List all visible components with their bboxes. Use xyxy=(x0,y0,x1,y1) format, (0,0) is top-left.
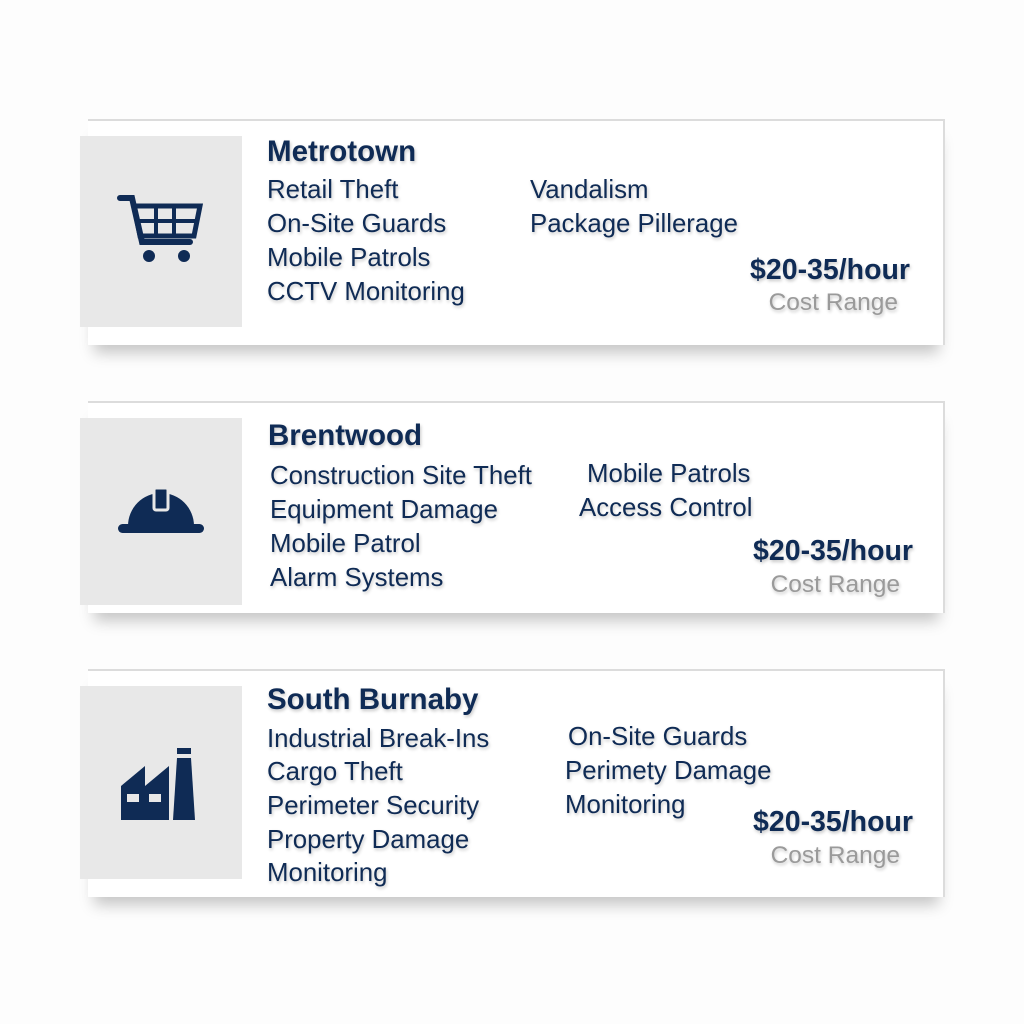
panel: South Burnaby: Property Damage xyxy=(267,826,469,854)
list: Construction Site Theft xyxy=(270,462,532,490)
panel: Metrotown: Cost Range xyxy=(769,289,898,316)
panel: South Burnaby: Perimeter Security xyxy=(267,792,479,820)
heading: Brentwood xyxy=(268,419,422,452)
list: Industrial Break-Ins xyxy=(267,725,489,753)
panel: Brentwood: Equipment Damage xyxy=(270,496,498,524)
panel: South Burnaby: Monitoring xyxy=(267,859,387,887)
panel: Brentwood xyxy=(80,401,946,628)
icon: factory xyxy=(80,686,242,879)
panel: South Burnaby: On-Site Guards xyxy=(568,723,747,751)
panel: Brentwood: Alarm Systems xyxy=(270,564,443,592)
panel: Brentwood: Cost Range xyxy=(771,571,900,598)
panel: Metrotown xyxy=(80,119,946,360)
panel: Metrotown: Vandalism xyxy=(530,176,649,204)
panel: South Burnaby xyxy=(80,669,946,912)
icon: hard hat xyxy=(80,418,242,605)
icon: shopping cart xyxy=(80,136,242,327)
panel: South Burnaby: Cost Range xyxy=(771,842,900,869)
panel: Brentwood: Mobile Patrols xyxy=(587,460,750,488)
panel: Metrotown: Mobile Patrols xyxy=(267,244,430,272)
panel: Metrotown: Package Pillerage xyxy=(530,210,738,238)
panel: Brentwood: Access Control xyxy=(579,494,752,522)
price: $20-35/hour xyxy=(750,254,910,286)
price: $20-35/hour xyxy=(753,535,913,567)
panel: South Burnaby: Cargo Theft xyxy=(267,758,403,786)
panel: Metrotown: On-Site Guards xyxy=(267,210,446,238)
panel: South Burnaby: Monitoring xyxy=(565,791,685,819)
panel: Brentwood: Mobile Patrol xyxy=(270,530,421,558)
list: Retail Theft xyxy=(267,176,398,204)
panel: Metrotown: CCTV Monitoring xyxy=(267,278,465,306)
heading: Metrotown xyxy=(267,135,416,168)
heading: South Burnaby xyxy=(267,683,478,716)
price: $20-35/hour xyxy=(753,806,913,838)
panel: South Burnaby: Perimety Damage xyxy=(565,757,771,785)
